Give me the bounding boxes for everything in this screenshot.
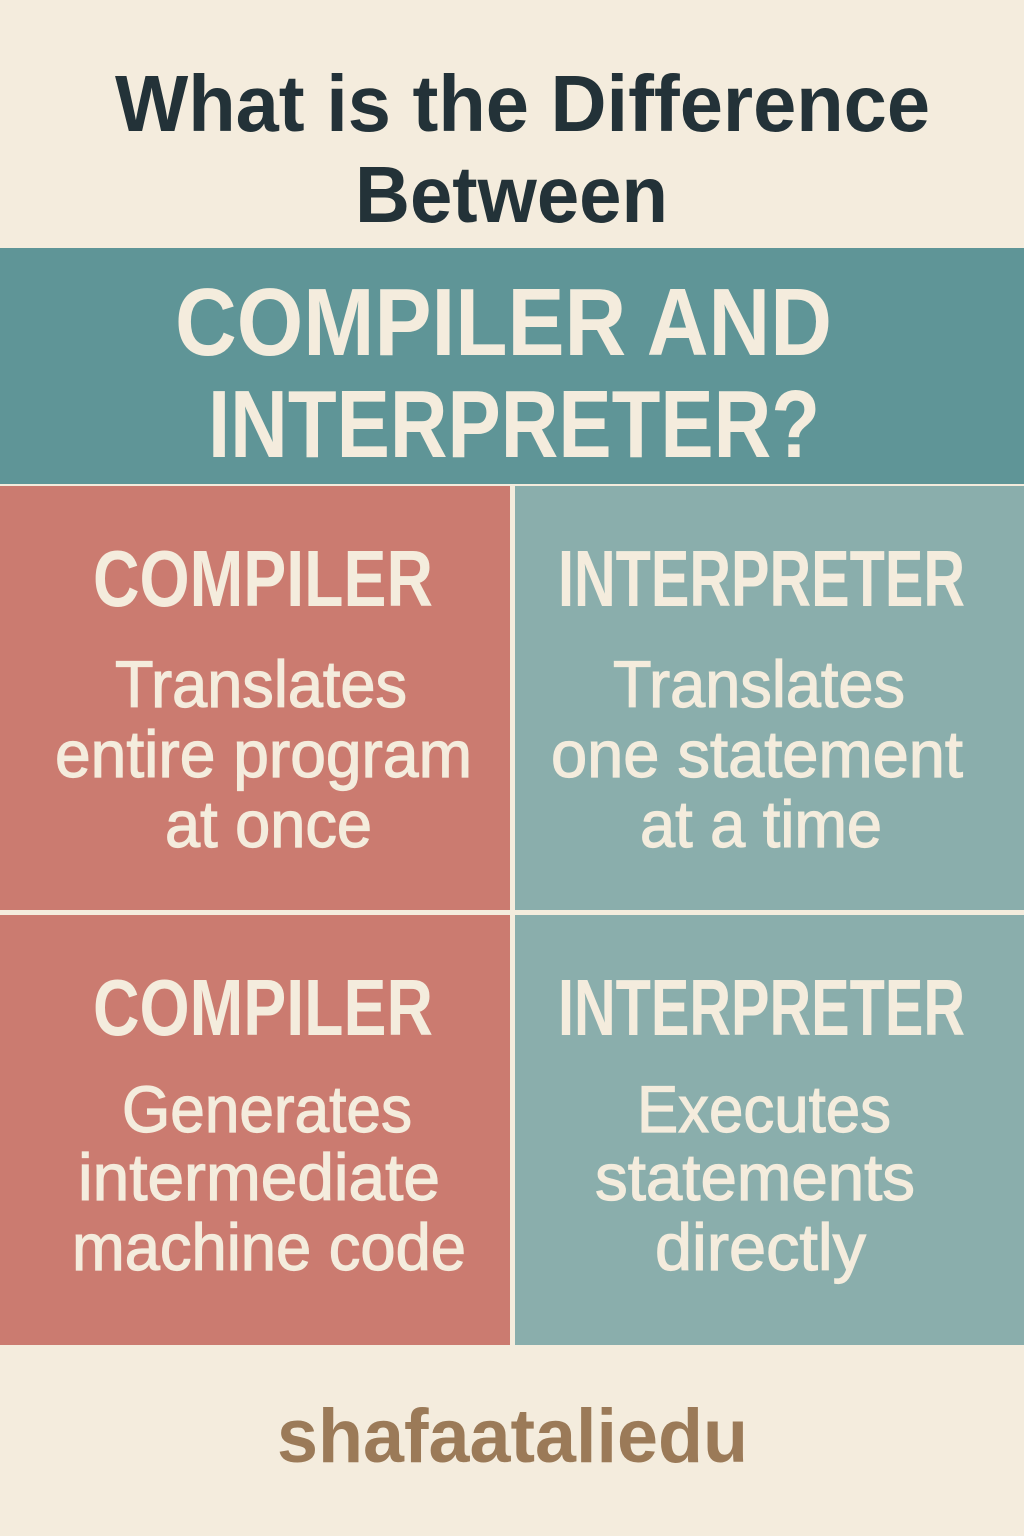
panel: interpreter executes: Executes [637, 1072, 891, 1146]
panel: compiler translates: entire program [55, 717, 472, 791]
panel: compiler generates: Generates [122, 1072, 412, 1146]
panel: interpreter translates: at a time [640, 787, 882, 861]
panel: interpreter executes: directly [655, 1210, 866, 1284]
panel: interpreter translates: one statement [551, 717, 963, 791]
panel: interpreter executes [515, 915, 1024, 1345]
panel: interpreter executes: statements [595, 1140, 915, 1214]
panel: compiler translates [0, 486, 510, 910]
title [115, 59, 930, 239]
panel: interpreter translates: Translates [613, 647, 905, 721]
panel: interpreter translates [515, 486, 1024, 910]
banner: compiler and interpreter: INTERPRETER? [208, 371, 820, 478]
panel: compiler generates: machine code [72, 1210, 466, 1284]
panel: compiler generates [0, 915, 510, 1345]
panel: compiler translates: at once [165, 787, 372, 861]
panel: compiler generates: COMPILER [93, 963, 433, 1052]
panel: compiler translates: Translates [115, 647, 407, 721]
banner: compiler and interpreter: COMPILER AND [175, 269, 832, 376]
title: Between [355, 150, 668, 239]
panel: compiler translates: COMPILER [93, 534, 433, 623]
panel: compiler generates: intermediate [78, 1140, 440, 1214]
footer: brand: shafaataliedu [277, 1394, 748, 1479]
banner: compiler and interpreter [0, 248, 1024, 484]
title: What is the Difference [115, 59, 930, 148]
